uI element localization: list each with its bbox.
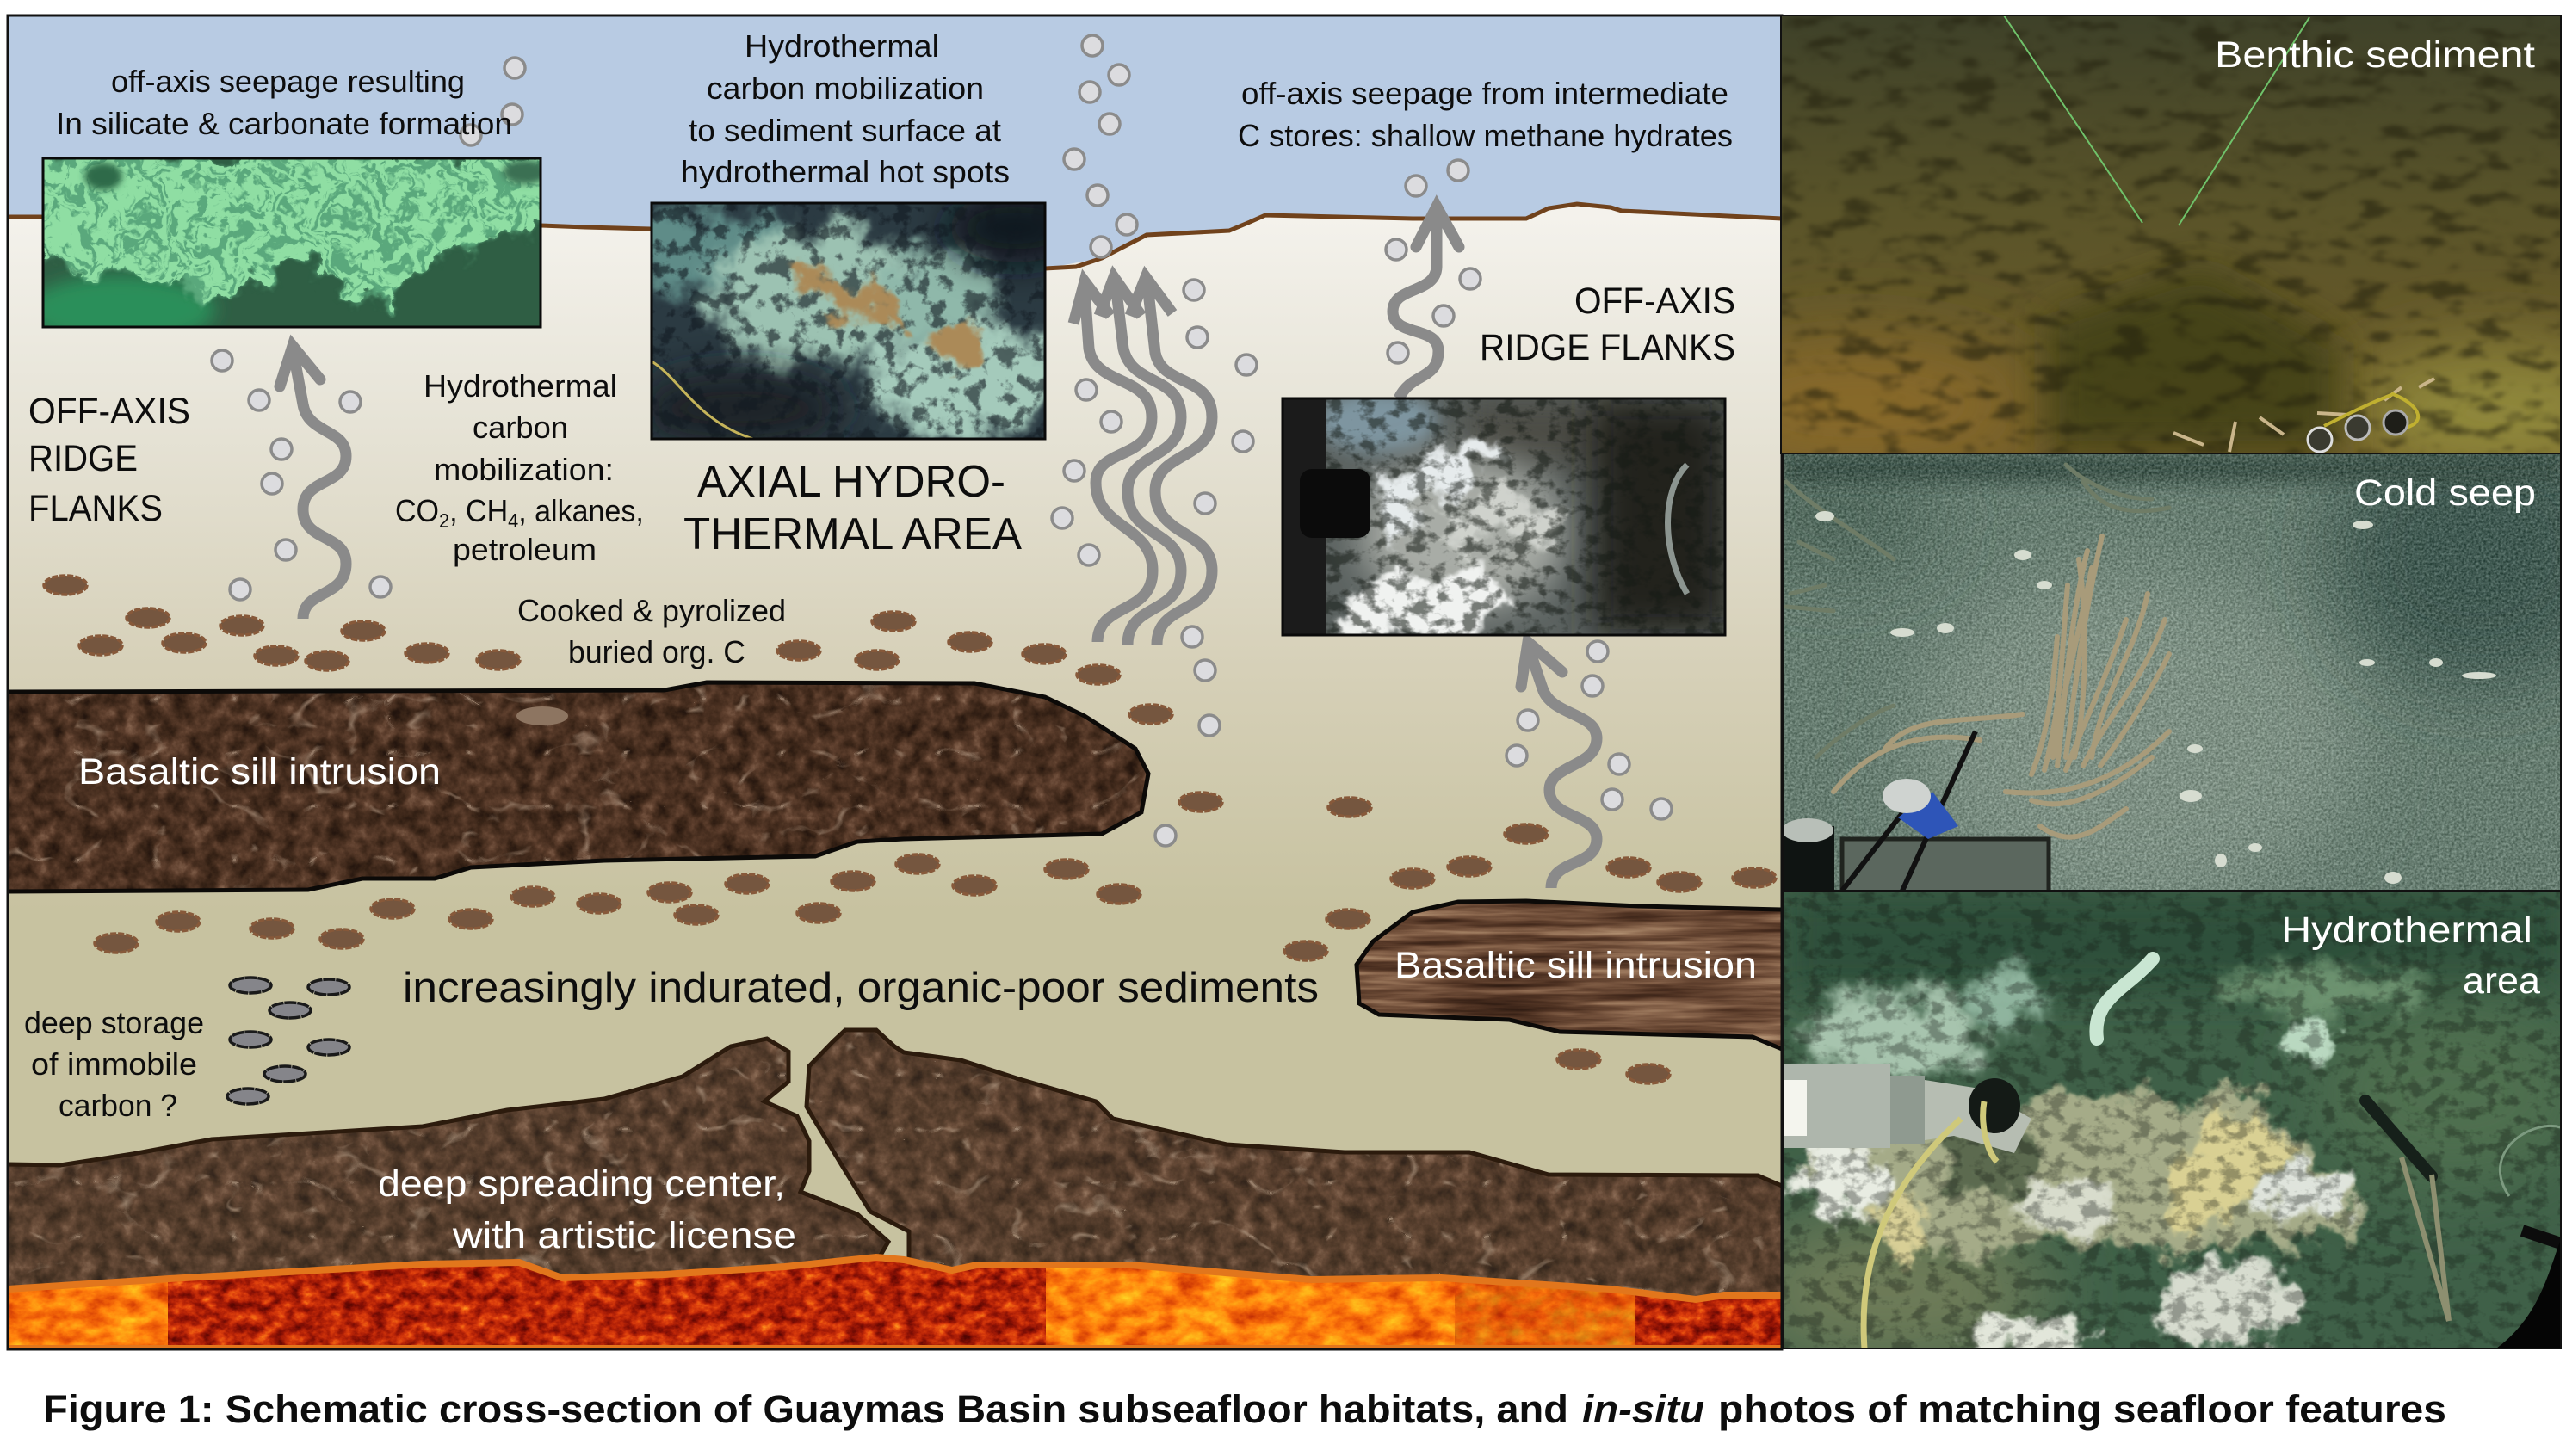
arrows: axial hydrothermal mobilization <box>1073 277 1212 645</box>
arrow: left off-axis seepage <box>280 346 346 619</box>
seafloor line <box>8 204 1782 268</box>
text: hydrothermal carbon mobilization to surface <box>681 28 1010 189</box>
text: hydrothermal carbon mobilization to surface: Hydrothermal <box>745 28 939 64</box>
heading: axial hydrothermal area <box>683 457 1022 559</box>
text: deep storage of immobile carbon: carbon ? <box>59 1088 177 1123</box>
text: off-axis seepage from intermediate stores: off-axis seepage from intermediate <box>1241 76 1728 111</box>
caption: photos of matching seafloor features <box>1718 1387 2446 1431</box>
sediment column <box>8 204 1782 1349</box>
text: cooked and pyrolized carbon: Cooked & pyrolized <box>517 593 786 628</box>
label: Hydrothermal area <box>2281 910 2540 1002</box>
immobile carbon pods <box>227 978 349 1104</box>
text: off-axis seepage, silicate and carbonate <box>56 64 512 141</box>
label: basaltic sill, left: Basaltic sill intrusion <box>78 751 441 793</box>
text: hydrothermal carbon mobilization compounds: petroleum <box>453 532 597 567</box>
heading: off-axis ridge flanks, left: OFF-AXIS <box>28 391 190 432</box>
caption: in-situ <box>1582 1387 1704 1431</box>
label: deep spreading center: deep spreading center, <box>378 1163 785 1205</box>
seawater <box>8 15 1782 274</box>
text: indurated sediments: increasingly indurated, organic-poor sediments <box>403 965 1319 1011</box>
buried organic carbon pods <box>44 576 1776 1083</box>
frame <box>8 15 1782 1349</box>
label: basaltic sill, right: Basaltic sill intrusion <box>1394 945 1757 986</box>
inset photo: methane hydrates <box>1283 392 1730 635</box>
text: hydrothermal carbon mobilization compounds: Hydrothermal <box>424 368 617 404</box>
photo: cold seep <box>1730 413 2566 912</box>
arrow: right off-axis seepage, upper <box>1393 207 1459 398</box>
heading: off-axis ridge flanks, left: FLANKS <box>28 488 163 529</box>
heading: off-axis ridge flanks, right: OFF-AXIS <box>1574 281 1735 322</box>
photo: hydrothermal area <box>1739 891 2566 1368</box>
text: hydrothermal carbon mobilization to surface: hydrothermal hot spots <box>681 154 1010 189</box>
arrow: right off-axis seepage, lower <box>1521 642 1597 888</box>
text: deep storage of immobile carbon: deep storage <box>24 1005 204 1040</box>
panel: schematic cross-section <box>8 15 1786 1351</box>
text: hydrothermal carbon mobilization compounds: CO <box>395 494 439 528</box>
text: hydrothermal carbon mobilization compounds: 2 <box>439 509 449 532</box>
caption <box>43 1387 2446 1431</box>
text: off-axis seepage, silicate and carbonate: In silicate & carbonate formation <box>56 106 512 141</box>
deep spreading center rock <box>8 1024 1785 1304</box>
text: hydrothermal carbon mobilization compounds <box>395 368 644 567</box>
text: hydrothermal carbon mobilization compounds: mobilization: <box>434 452 614 487</box>
text: off-axis seepage from intermediate stores <box>1238 76 1733 153</box>
heading: axial hydrothermal area: THERMAL AREA <box>683 509 1022 559</box>
magma layer <box>8 1252 1785 1351</box>
text: hydrothermal carbon mobilization compounds: 4 <box>508 509 518 532</box>
label: Hydrothermal area: Hydrothermal <box>2281 910 2532 951</box>
inset photo: hydrothermal hot spot <box>651 201 1047 441</box>
text: hydrothermal carbon mobilization to surface: carbon mobilization <box>707 71 984 106</box>
photo: benthic sediment <box>1780 15 2562 454</box>
basaltic sill, left <box>8 671 1161 904</box>
heading: off-axis ridge flanks, right: RIDGE FLANKS <box>1480 327 1735 368</box>
label: deep spreading center: with artistic license <box>452 1215 796 1256</box>
text: cooked and pyrolized carbon: buried org. C <box>568 634 745 669</box>
heading: off-axis ridge flanks, left: RIDGE <box>28 438 138 479</box>
text: hydrothermal carbon mobilization to surface: to sediment surface at <box>689 113 1001 148</box>
basaltic sill, right <box>1351 895 1786 1054</box>
text: hydrothermal carbon mobilization compounds: carbon <box>473 410 568 445</box>
inset photo: silicate and carbonate mat <box>41 157 542 329</box>
label: deep spreading center <box>378 1163 796 1256</box>
heading: axial hydrothermal area: AXIAL HYDRO- <box>697 457 1005 507</box>
text: off-axis seepage, silicate and carbonate: off-axis seepage resulting <box>111 64 465 99</box>
bubbles <box>212 35 1672 846</box>
heading: off-axis ridge flanks, right <box>1480 281 1735 368</box>
text: deep storage of immobile carbon: of immobile <box>31 1046 197 1082</box>
text: cooked and pyrolized carbon <box>517 593 786 669</box>
heading: off-axis ridge flanks, left <box>28 391 190 529</box>
text: off-axis seepage from intermediate stores: C stores: shallow methane hydrates <box>1238 118 1733 153</box>
label: Cold seep: Cold seep <box>2354 472 2536 514</box>
label: Hydrothermal area: area <box>2463 960 2540 1002</box>
caption: Figure 1: Schematic cross-section of Guaymas Basin subseafloor habitats, and <box>43 1387 1568 1431</box>
label: Benthic sediment: Benthic sediment <box>2215 34 2535 76</box>
text: hydrothermal carbon mobilization compounds: , alkanes, <box>518 494 644 528</box>
text: deep storage of immobile carbon <box>24 1005 204 1123</box>
text: hydrothermal carbon mobilization compounds: , CH <box>449 494 508 528</box>
